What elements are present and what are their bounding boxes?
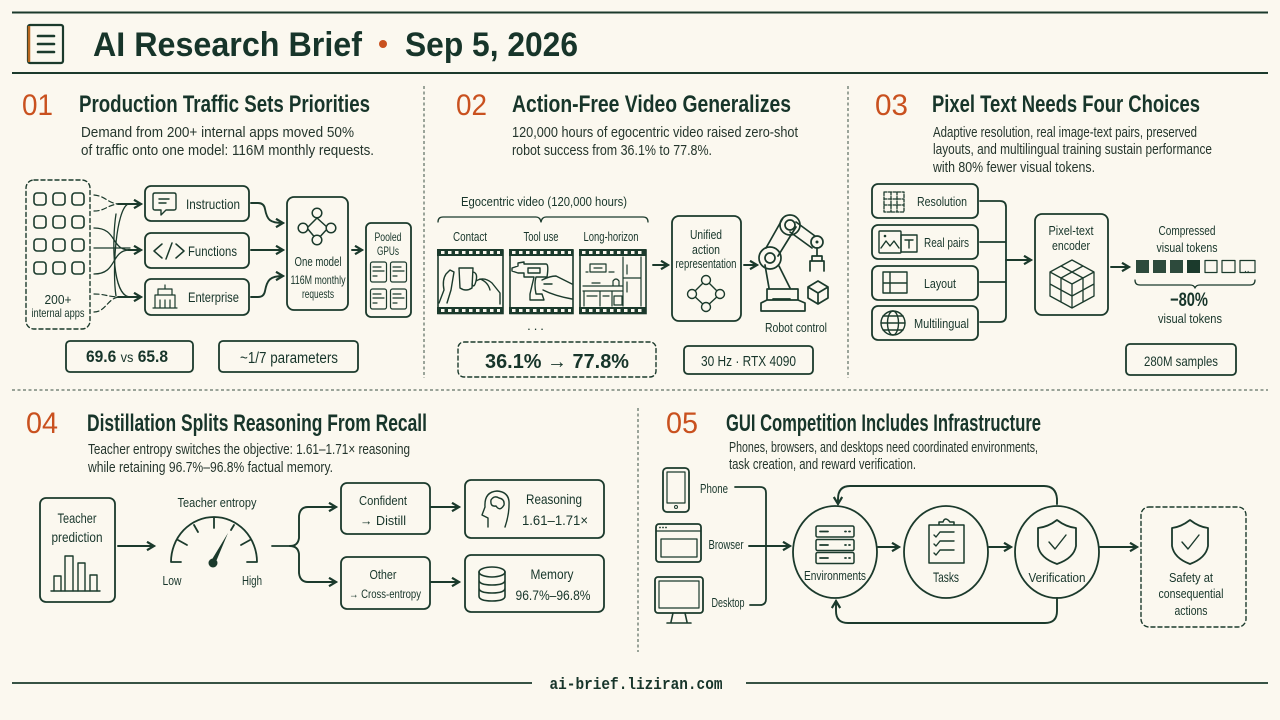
arrow: action to robot bbox=[744, 264, 757, 266]
box: confident distill: Confident bbox=[359, 493, 407, 508]
circle: environments: Environments bbox=[804, 568, 866, 583]
text block 03 bbox=[932, 125, 1212, 176]
arrows: apps to categories bbox=[94, 195, 141, 312]
stat: 30 Hz RTX 4090: 30 Hz · RTX 4090 bbox=[701, 353, 796, 370]
box: reasoning outcome: 1.61–1.71× bbox=[522, 512, 588, 528]
box: reasoning outcome bbox=[465, 480, 604, 538]
box: one model: One model bbox=[294, 254, 342, 269]
stat: 69.6 vs 65.8: 69.6 vs 65.8 bbox=[86, 347, 168, 366]
film frame: long-horizon kitchen bbox=[579, 229, 646, 314]
text block 01: of traffic onto one model: 116M monthly requests. bbox=[81, 143, 374, 159]
film frame: tool use bbox=[509, 229, 573, 314]
text block 03: with 80% fewer visual tokens. bbox=[932, 160, 1095, 176]
gauge: teacher entropy: High bbox=[242, 573, 262, 588]
stat: 280M samples: 280M samples bbox=[1144, 353, 1218, 369]
stat: 30 Hz RTX 4090 bbox=[684, 346, 813, 374]
arrow: prediction to gauge bbox=[118, 545, 154, 547]
section number 05: 05 bbox=[666, 407, 698, 440]
box: safety at consequential actions: actions bbox=[1174, 603, 1208, 618]
stat: 69.6 vs 65.8 bbox=[66, 341, 193, 372]
box: safety at consequential actions: Safety at bbox=[1169, 570, 1213, 585]
text block 03: layouts, and multilingual training sustain performance bbox=[933, 142, 1212, 158]
box: resolution bbox=[872, 184, 978, 218]
text block 04 bbox=[87, 442, 410, 476]
icon: notebook bbox=[28, 25, 63, 63]
circle: verification bbox=[1015, 506, 1099, 598]
box: multilingual: Multilingual bbox=[914, 316, 969, 331]
text block 01 bbox=[81, 125, 374, 159]
box: instruction bbox=[145, 186, 249, 221]
box: confident distill: → Distill bbox=[360, 513, 406, 528]
text block 04: Teacher entropy switches the objective: 1.61–1.71× reasoning bbox=[88, 442, 410, 458]
circle: tasks: Tasks bbox=[933, 569, 959, 585]
arrow: bottom feedback loop bbox=[836, 598, 1057, 623]
device: phone: Phone bbox=[700, 482, 728, 496]
section number 02: 02 bbox=[456, 89, 487, 122]
arrow: tasks to verification bbox=[989, 546, 1011, 548]
box: resolution: Resolution bbox=[917, 194, 967, 209]
section number 01: 01 bbox=[22, 89, 53, 122]
text block 04: while retaining 96.7%–96.8% factual memory. bbox=[87, 460, 333, 476]
text block 05 bbox=[729, 440, 1038, 473]
heading 01: Production Traffic Sets Priorities bbox=[79, 91, 370, 118]
text block 01: Demand from 200+ internal apps moved 50% bbox=[81, 125, 354, 141]
box: pixel-text encoder: Pixel-text bbox=[1048, 223, 1094, 238]
box: layout bbox=[872, 266, 978, 300]
gauge: teacher entropy: Low bbox=[162, 573, 182, 588]
box: memory outcome bbox=[465, 555, 604, 612]
panel: 02 action-free video bbox=[437, 89, 828, 377]
text block 02 bbox=[512, 125, 798, 159]
heading 05: GUI Competition Includes Infrastructure bbox=[726, 410, 1041, 437]
arrow: inputs to encoder bbox=[980, 201, 1031, 322]
box: real pairs: Real pairs bbox=[924, 235, 969, 250]
footer: ai-brief.liziran.com bbox=[550, 676, 722, 695]
box: enterprise: Enterprise bbox=[188, 289, 239, 305]
film frame: tool use: Tool use bbox=[524, 229, 558, 244]
box: one model: requests bbox=[302, 287, 334, 301]
arrow: environments to tasks bbox=[878, 546, 899, 548]
section number 03: 03 bbox=[875, 89, 908, 122]
circle: environments bbox=[793, 506, 877, 598]
title: Sep 5, 2026 bbox=[405, 26, 578, 64]
box: safety at consequential actions bbox=[1141, 507, 1246, 627]
box: teacher prediction: Teacher bbox=[58, 510, 97, 526]
box: functions: Functions bbox=[188, 243, 237, 259]
label: egocentric video bbox=[438, 194, 648, 222]
arrow: model to GPUs bbox=[352, 249, 362, 251]
arrow: encoder to tokens bbox=[1111, 266, 1129, 268]
internal apps grid: internal apps bbox=[32, 306, 84, 320]
device: browser: Browser bbox=[708, 538, 744, 552]
panel: 05 GUI competition bbox=[655, 407, 1246, 627]
stat: 36.1% to 77.8%: 36.1% → 77.8% bbox=[485, 351, 629, 373]
panel: 04 distillation bbox=[26, 407, 604, 612]
title: AI Research Brief bbox=[93, 26, 363, 64]
text block 03: Adaptive resolution, real image-text pairs, preserved bbox=[933, 125, 1197, 141]
box: pooled GPUs bbox=[366, 223, 411, 317]
icon: robot arm bbox=[759, 215, 828, 311]
box: memory outcome: Memory bbox=[530, 566, 574, 582]
stat: parameters bbox=[219, 341, 358, 372]
stat: parameters: ~1/7 parameters bbox=[240, 350, 338, 367]
box: other cross-entropy: → Cross-entropy bbox=[349, 587, 421, 601]
box: safety at consequential actions: consequential bbox=[1158, 586, 1224, 601]
arrow: video to action bbox=[653, 264, 668, 266]
circle: tasks bbox=[904, 506, 988, 598]
film frame: contact: Contact bbox=[453, 229, 487, 244]
box: other cross-entropy: Other bbox=[370, 567, 397, 582]
box: memory outcome: 96.7%–96.8% bbox=[516, 587, 590, 603]
text block 02: robot success from 36.1% to 77.8%. bbox=[512, 143, 712, 159]
box: unified action representation bbox=[672, 216, 741, 321]
box: unified action representation: representation bbox=[676, 256, 736, 271]
box: pixel-text encoder bbox=[1035, 214, 1108, 315]
film frame: long-horizon kitchen: Long-horizon bbox=[584, 229, 638, 244]
box: other cross-entropy bbox=[341, 557, 430, 609]
box: enterprise bbox=[145, 279, 249, 315]
gauge: teacher entropy: Teacher entropy bbox=[178, 495, 257, 510]
more frames ellipsis: ... bbox=[527, 318, 547, 333]
heading 03: Pixel Text Needs Four Choices bbox=[932, 91, 1200, 118]
panel: 01 production traffic bbox=[22, 89, 411, 372]
box: pooled GPUs: Pooled bbox=[374, 230, 402, 244]
arrow: verification to safety bbox=[1100, 546, 1137, 548]
box: real pairs bbox=[872, 225, 978, 259]
box: instruction: Instruction bbox=[186, 196, 240, 212]
box: reasoning outcome: Reasoning bbox=[526, 491, 582, 507]
box: functions bbox=[145, 233, 249, 268]
internal apps grid bbox=[26, 180, 90, 329]
box: one model bbox=[287, 197, 348, 310]
film frame: contact bbox=[437, 229, 503, 314]
box: one model: 116M monthly bbox=[290, 273, 346, 287]
box: unified action representation: action bbox=[692, 242, 720, 257]
compressed token strip: visual tokens bbox=[1156, 240, 1218, 255]
box: teacher prediction: prediction bbox=[52, 529, 102, 545]
device: phone bbox=[663, 468, 728, 512]
arrow: devices to environments bbox=[735, 487, 790, 605]
circle: verification: Verification bbox=[1028, 570, 1086, 585]
text block 05: task creation, and reward verification. bbox=[729, 457, 916, 473]
box: unified action representation: Unified bbox=[690, 227, 722, 242]
device: browser bbox=[656, 524, 744, 562]
compressed token strip: .. bbox=[1244, 264, 1250, 275]
compressed token strip: −80% bbox=[1170, 290, 1208, 311]
text block 02: 120,000 hours of egocentric video raised zero-shot bbox=[512, 125, 798, 141]
device: desktop: Desktop bbox=[712, 596, 745, 610]
compressed token strip: visual tokens bbox=[1158, 311, 1222, 326]
label: egocentric video: Egocentric video (120,000 hours) bbox=[461, 194, 627, 209]
arrows: categories to model bbox=[251, 203, 283, 297]
label: robot control: Robot control bbox=[765, 320, 827, 335]
arrows: to outcomes bbox=[431, 507, 459, 582]
stat: 36.1% to 77.8% bbox=[458, 342, 656, 377]
box: confident distill bbox=[341, 483, 430, 534]
box: pooled GPUs: GPUs bbox=[377, 244, 399, 258]
section number 04: 04 bbox=[26, 407, 58, 440]
text block 05: Phones, browsers, and desktops need coordinated environments, bbox=[729, 440, 1038, 456]
box: multilingual bbox=[872, 306, 978, 340]
box: layout: Layout bbox=[924, 276, 956, 291]
panel: 03 pixel text bbox=[872, 89, 1255, 375]
arrow: top feedback loop bbox=[838, 486, 1057, 504]
compressed token strip bbox=[1135, 223, 1255, 326]
title bbox=[93, 26, 578, 64]
heading 04: Distillation Splits Reasoning From Recall bbox=[87, 410, 427, 437]
stat: 280M samples bbox=[1126, 344, 1236, 375]
device: desktop bbox=[655, 577, 745, 623]
box: pixel-text encoder: encoder bbox=[1052, 238, 1091, 253]
gauge: teacher entropy bbox=[162, 495, 262, 588]
internal apps grid: 200+ bbox=[44, 292, 72, 307]
heading 02: Action-Free Video Generalizes bbox=[512, 91, 791, 118]
compressed token strip: Compressed bbox=[1158, 223, 1216, 238]
arrow: branch split bbox=[272, 507, 336, 582]
box: teacher prediction bbox=[40, 498, 115, 602]
